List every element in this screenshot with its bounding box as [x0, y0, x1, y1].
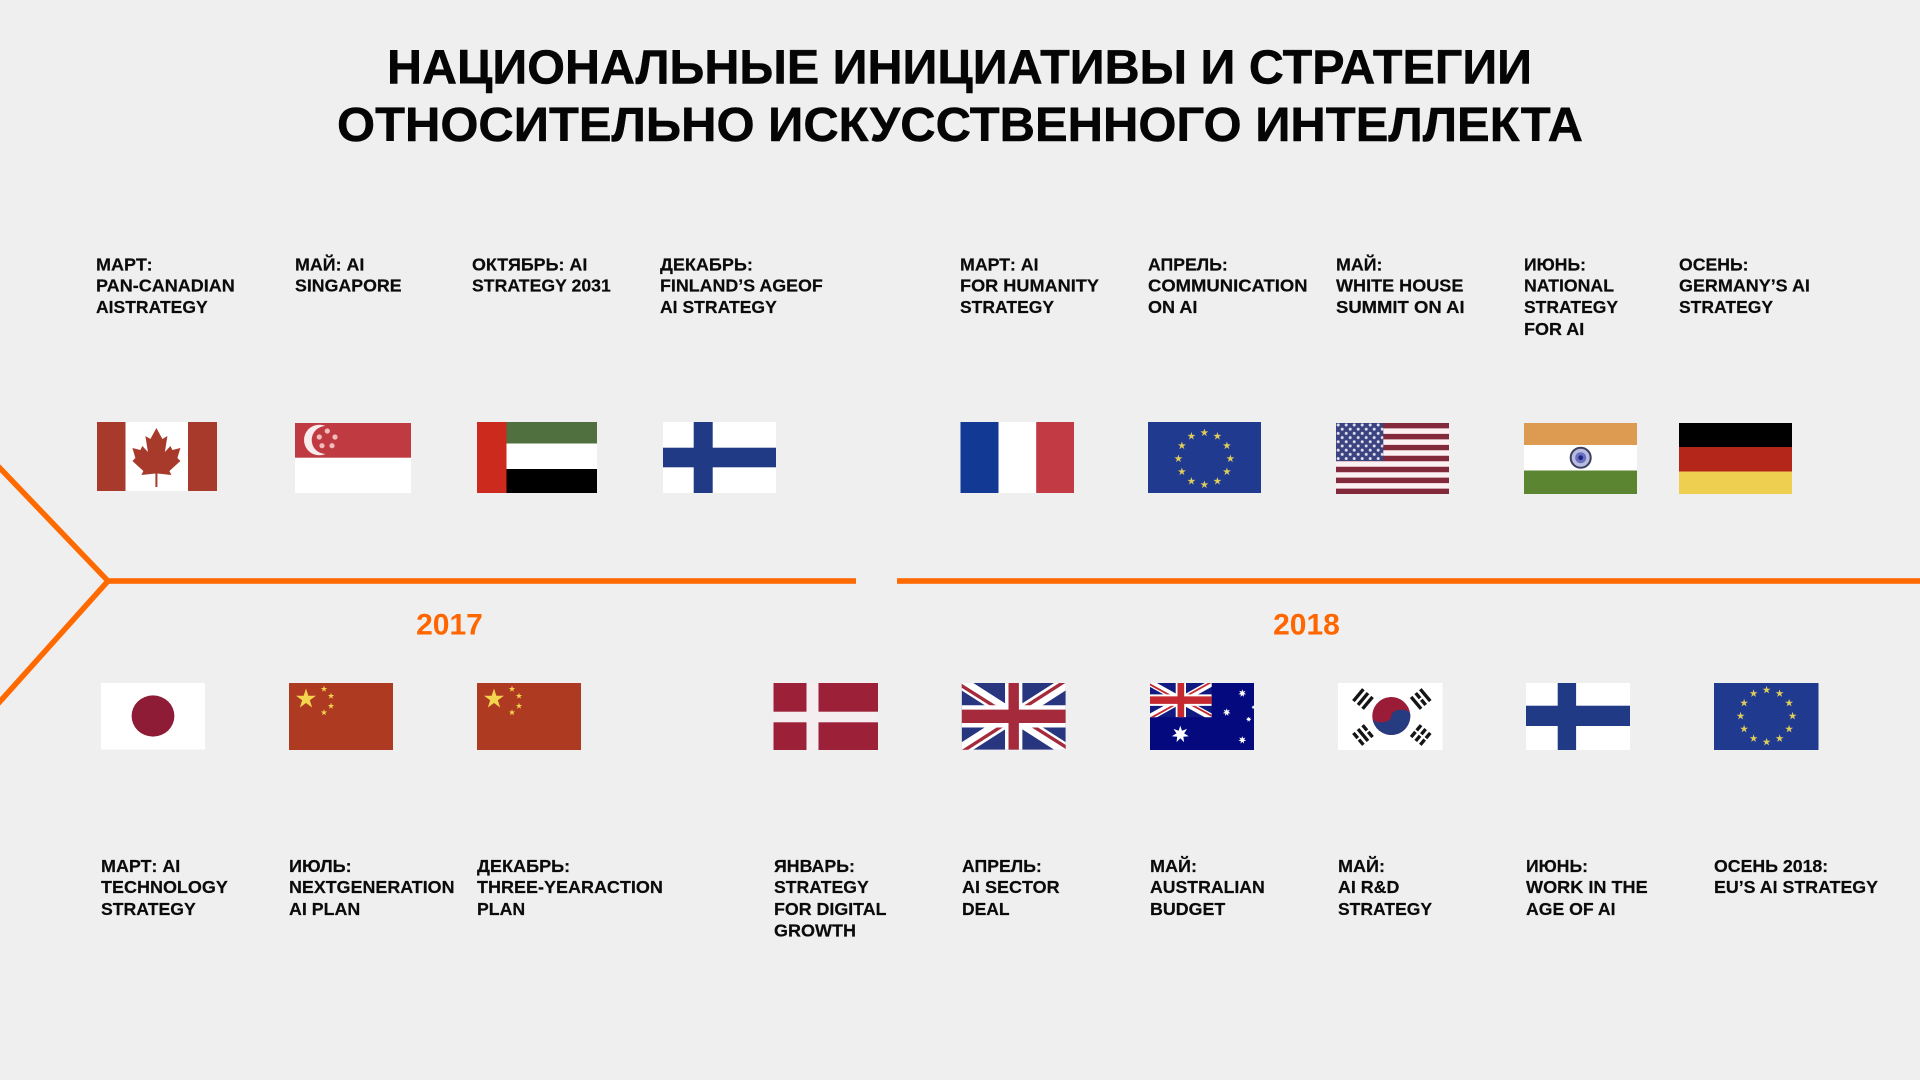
caption: South Korea: AI R&D — [1338, 877, 1400, 897]
flag: South Korea — [1338, 683, 1442, 750]
caption: Finland 2018: ИЮНЬ: — [1526, 856, 1588, 876]
caption: United Kingdom: AI SECTOR — [962, 877, 1060, 897]
caption: Finland: FINLAND’S AGEOF — [660, 275, 823, 295]
caption: Finland: AI STRATEGY — [660, 297, 777, 317]
caption: USA: SUMMIT ON AI — [1336, 297, 1465, 317]
caption: Finland 2018 — [1526, 856, 1648, 919]
caption: Germany: ОСЕНЬ: — [1679, 254, 1748, 274]
caption: India: FOR AI — [1524, 319, 1584, 339]
caption: UAE: STRATEGY 2031 — [472, 275, 611, 295]
caption: India: ИЮНЬ: — [1524, 254, 1586, 274]
year label 2017: 2017 — [416, 608, 483, 642]
caption: Singapore: SINGAPORE — [295, 275, 402, 295]
caption: Denmark: ЯНВАРЬ: — [774, 856, 855, 876]
caption: China December: THREE-YEARACTION — [477, 877, 663, 897]
caption: South Korea: МАЙ: — [1338, 855, 1385, 876]
caption: Singapore — [295, 253, 402, 295]
caption: USA: МАЙ: — [1336, 253, 1382, 274]
caption: India: STRATEGY — [1524, 297, 1618, 317]
caption: Denmark: FOR DIGITAL — [774, 899, 887, 919]
flag: Japan — [101, 683, 205, 750]
caption: Finland 2018: WORK IN THE — [1526, 877, 1648, 897]
flag: Germany — [1679, 423, 1792, 494]
timeline arrow chevron — [0, 464, 108, 706]
caption: Canada — [96, 254, 235, 317]
flag: UAE — [477, 422, 597, 493]
caption: Australia: AUSTRALIAN — [1150, 877, 1265, 897]
flag: Singapore — [295, 423, 411, 493]
title: ОТНОСИТЕЛЬНО ИСКУССТВЕННОГО ИНТЕЛЛЕКТА — [337, 98, 1583, 152]
caption: Germany: STRATEGY — [1679, 297, 1773, 317]
caption: Finland — [660, 254, 823, 317]
flag: Canada — [97, 422, 217, 491]
caption: China July: NEXTGENERATION — [289, 877, 454, 897]
timeline axis 2018 — [897, 578, 1920, 584]
caption: Canada: AISTRATEGY — [96, 297, 208, 317]
caption: Finland 2018: AGE OF AI — [1526, 899, 1616, 919]
caption: EU autumn 2018: EU’S AI STRATEGY — [1714, 877, 1878, 897]
caption: China July: ИЮЛЬ: — [289, 856, 352, 876]
caption: USA: WHITE HOUSE — [1336, 275, 1464, 295]
caption: Australia — [1150, 855, 1265, 919]
caption: Canada: МАРТ: — [96, 254, 153, 274]
flag: USA — [1336, 423, 1449, 494]
caption: EU autumn 2018: ОСЕНЬ 2018: — [1714, 856, 1828, 876]
caption: China December: ДЕКАБРЬ: — [477, 856, 570, 876]
caption: Canada: PAN-CANADIAN — [96, 275, 235, 295]
flag: France — [960, 422, 1074, 493]
caption: China December: PLAN — [477, 899, 525, 919]
caption: EU autumn 2018 — [1714, 856, 1878, 897]
caption: Australia: МАЙ: — [1150, 855, 1197, 876]
flag: Finland 2018 — [1526, 683, 1630, 750]
caption: China December — [477, 856, 663, 919]
title — [337, 41, 1583, 152]
caption: France: STRATEGY — [960, 297, 1054, 317]
caption: UAE — [472, 254, 611, 295]
caption: United Kingdom — [962, 856, 1060, 919]
flag: EU communication — [1148, 422, 1261, 493]
caption: Japan: МАРТ: AI — [101, 856, 180, 876]
caption: China July: AI PLAN — [289, 899, 360, 919]
flag: Denmark — [774, 683, 878, 750]
year label 2018: 2018 — [1273, 608, 1340, 642]
caption: Japan — [101, 856, 228, 919]
caption: EU communication: АПРЕЛЬ: — [1148, 254, 1228, 274]
flag: EU autumn 2018 — [1714, 683, 1818, 750]
flag: China July — [289, 683, 393, 750]
title: НАЦИОНАЛЬНЫЕ ИНИЦИАТИВЫ И СТРАТЕГИИ — [387, 41, 1532, 95]
caption: EU communication — [1148, 254, 1308, 317]
flag: Australia — [1149, 682, 1256, 750]
flag: United Kingdom — [962, 683, 1066, 750]
caption: United Kingdom: DEAL — [962, 899, 1010, 919]
caption: Singapore: МАЙ: AI — [295, 253, 364, 274]
caption: India: NATIONAL — [1524, 275, 1614, 295]
caption: South Korea — [1338, 855, 1432, 919]
caption: Denmark — [774, 856, 887, 940]
caption: Australia: BUDGET — [1150, 899, 1225, 919]
caption: Denmark: GROWTH — [774, 920, 856, 940]
flag: Finland 2017 — [663, 422, 776, 493]
caption: Denmark: STRATEGY — [774, 877, 869, 897]
caption: France: МАРТ: AI — [960, 254, 1039, 274]
caption: United Kingdom: АПРЕЛЬ: — [962, 856, 1042, 876]
caption: USA — [1336, 253, 1465, 317]
caption: UAE: ОКТЯБРЬ: AI — [472, 254, 587, 274]
caption: France — [960, 254, 1099, 317]
caption: South Korea: STRATEGY — [1338, 899, 1432, 919]
caption: India — [1524, 254, 1618, 339]
caption: EU communication: ON AI — [1148, 297, 1197, 317]
caption: France: FOR HUMANITY — [960, 275, 1099, 295]
caption: Japan: TECHNOLOGY — [101, 877, 228, 897]
caption: EU communication: COMMUNICATION — [1148, 275, 1308, 295]
caption: Germany — [1679, 254, 1810, 317]
caption: Germany: GERMANY’S AI — [1679, 275, 1810, 295]
flag: India — [1524, 423, 1637, 494]
caption: Japan: STRATEGY — [101, 899, 196, 919]
flag: China December — [477, 683, 581, 750]
caption: China July — [289, 856, 454, 919]
caption: Finland: ДЕКАБРЬ: — [660, 254, 753, 274]
timeline axis 2017 — [106, 578, 856, 584]
